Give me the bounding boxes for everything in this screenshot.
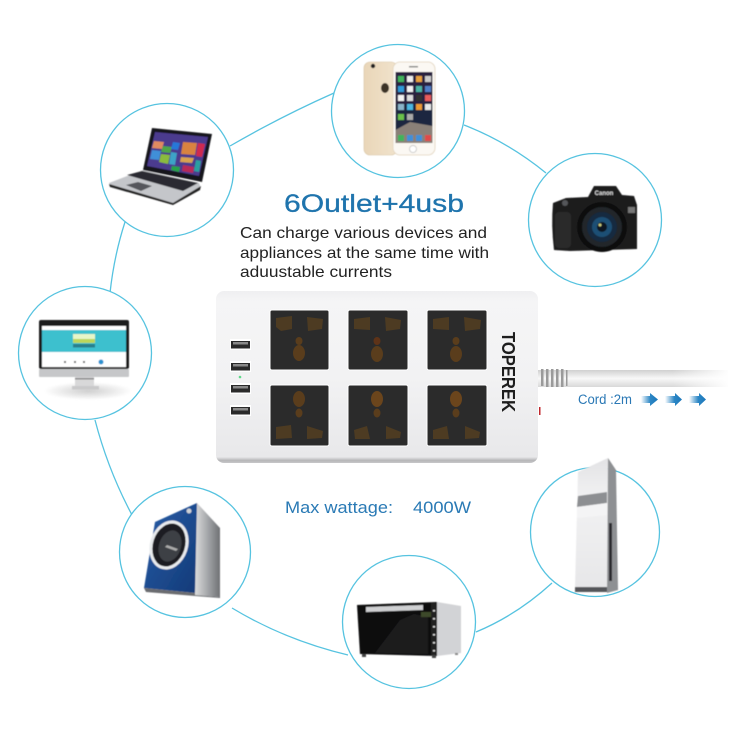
description text: Can charge various devices and <box>240 225 487 242</box>
icon: desktop monitor <box>39 320 132 400</box>
socket: row 2 column 2 <box>348 385 408 446</box>
max wattage label: Max wattage: <box>285 499 393 517</box>
icon: microwave oven <box>357 602 461 658</box>
brand logo: TOPEREK <box>498 332 518 412</box>
connector arcs between device circles <box>95 93 552 655</box>
cord strain relief <box>541 369 568 387</box>
socket: row 1 column 3 <box>427 310 487 370</box>
description text: appliances at the same time with <box>240 245 489 262</box>
circle: air conditioner <box>530 458 660 596</box>
circle: washing machine <box>120 486 250 618</box>
description text <box>240 225 489 281</box>
description text: aduustable currents <box>240 264 392 281</box>
arrows: cord direction <box>641 393 706 406</box>
USB ports <box>230 339 251 416</box>
power strip <box>216 291 538 463</box>
socket: row 2 column 1 <box>270 385 329 446</box>
icon: washing machine <box>143 503 220 598</box>
circle: smartphone <box>332 44 464 178</box>
icon: smartphone <box>364 62 435 155</box>
circle: laptop <box>100 104 234 236</box>
switch mark <box>539 407 540 415</box>
circle: camera <box>528 154 662 286</box>
cord length label: Cord :2m <box>578 392 632 407</box>
brand label: camera: Canon <box>595 191 614 197</box>
socket: row 1 column 2 <box>348 310 408 370</box>
title: 6Outlet+4usb <box>284 190 464 218</box>
circle: microwave oven <box>342 556 476 688</box>
max wattage label: 4000W <box>413 499 471 517</box>
circle: desktop monitor <box>18 286 152 420</box>
max wattage label <box>285 499 471 517</box>
icon: laptop <box>109 128 212 205</box>
icon: air conditioner <box>575 458 618 593</box>
socket: row 2 column 3 <box>427 385 487 446</box>
socket: row 1 column 1 <box>270 310 329 370</box>
power cord <box>538 368 730 389</box>
